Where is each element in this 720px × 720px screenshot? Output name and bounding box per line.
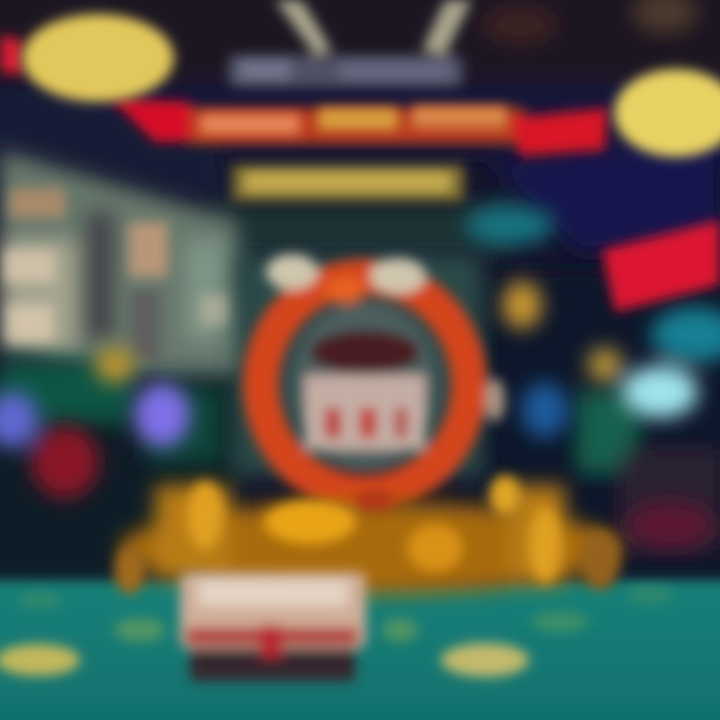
top arms — [228, 0, 472, 87]
slot machine details — [5, 188, 230, 360]
gold coin piles — [120, 485, 620, 594]
left wall with slot machines — [0, 150, 260, 400]
headline blurred lettering — [200, 106, 507, 201]
ceiling — [0, 0, 720, 255]
red ribbon — [0, 35, 608, 156]
lower dark band — [0, 255, 720, 585]
chips on table — [0, 587, 674, 677]
ceiling lamps — [22, 14, 720, 157]
red banner right — [602, 220, 720, 312]
roulette wheel — [261, 254, 505, 493]
gold coin highlights — [114, 475, 620, 594]
colored lights — [0, 205, 720, 549]
green felt table — [0, 580, 720, 720]
treasure chest — [180, 572, 366, 681]
